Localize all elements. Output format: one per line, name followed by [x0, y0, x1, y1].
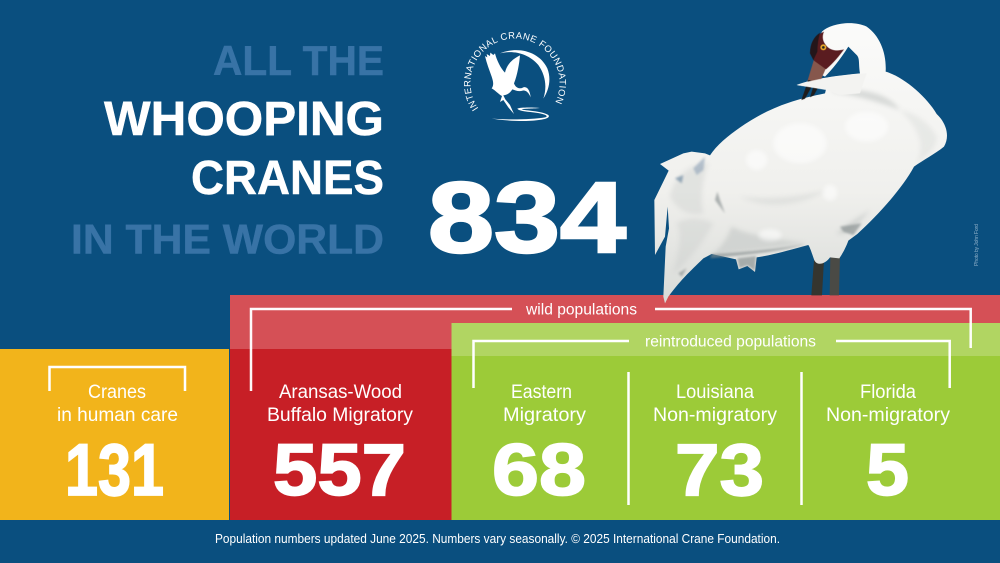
panel: wild populations band — [230, 295, 1000, 349]
label: Cranes — [88, 382, 146, 403]
title: IN THE WORLD — [71, 216, 384, 262]
number: 131 — [65, 430, 164, 511]
label: Eastern Migratory: Migratory — [503, 405, 587, 426]
crane eye — [820, 44, 826, 50]
number: 557 — [273, 430, 406, 511]
crane face dark patch — [810, 33, 820, 60]
total population number: 834 — [428, 162, 626, 274]
crane body — [654, 23, 947, 303]
panel: reintroduced populations — [452, 323, 1000, 520]
title: ALL THE — [213, 37, 384, 84]
reintroduced populations label: reintroduced populations — [645, 334, 816, 350]
panel: cranes in human care — [0, 349, 229, 520]
photo credit: Photo by John Ford — [974, 224, 980, 266]
crane wing plume over beak — [797, 73, 867, 95]
label: Louisiana Non-migratory: Non-migratory — [653, 405, 778, 426]
bracket — [50, 367, 185, 391]
label: Eastern Migratory — [503, 382, 587, 426]
crane feather shading — [670, 90, 937, 277]
wild populations label: wild populations — [525, 302, 637, 318]
label: Aransas-Wood — [279, 382, 402, 403]
title — [71, 37, 384, 262]
label: in human care — [57, 405, 178, 426]
panel: Aransas-Wood Buffalo Migratory — [230, 349, 452, 520]
label: Florida Non-migratory: Non-migratory — [826, 405, 951, 426]
reintroduced populations bracket — [474, 334, 950, 388]
icon: International Crane Foundation logo: INTERNATIONAL CRANE FOUNDATION — [464, 32, 566, 112]
crane legs — [811, 255, 840, 295]
wild populations bracket — [251, 302, 971, 391]
label: Eastern Migratory: Eastern — [511, 382, 572, 403]
number: 68: 68 — [492, 430, 586, 511]
photo: whooping crane — [654, 23, 947, 303]
crane face — [810, 32, 844, 69]
label: Buffalo Migratory — [267, 405, 413, 426]
title: WHOOPING — [104, 93, 384, 146]
label: Louisiana Non-migratory: Louisiana — [676, 382, 754, 403]
label — [57, 382, 178, 426]
number: 73: 73 — [675, 430, 764, 511]
footer note: Population numbers updated June 2025. Numbers vary seasonally. © 2025 International Crane Foundation. — [215, 532, 780, 546]
label — [267, 382, 413, 426]
label: Florida Non-migratory — [826, 382, 951, 426]
crane beak — [801, 59, 827, 100]
label: Florida Non-migratory: Florida — [860, 382, 916, 403]
label: Louisiana Non-migratory — [653, 382, 778, 426]
title: CRANES — [191, 152, 384, 205]
number: 5: 5 — [866, 430, 909, 511]
